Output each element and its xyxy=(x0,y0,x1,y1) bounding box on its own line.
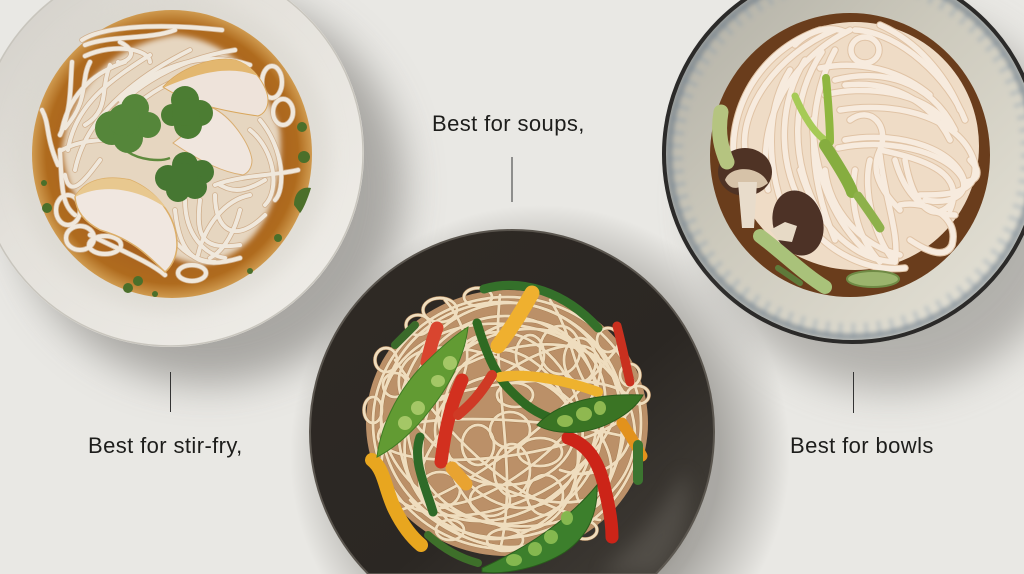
cilantro xyxy=(95,86,214,202)
caption: bowls: Best for bowls xyxy=(790,433,934,458)
panel: soup bowl xyxy=(0,0,404,384)
stir-fry noodles xyxy=(355,288,654,564)
vegetable strips xyxy=(372,285,642,563)
snap peas xyxy=(377,327,643,573)
soup noodles xyxy=(42,26,298,281)
noodle bowl broth xyxy=(710,13,990,297)
panel: noodle bowl with mushrooms xyxy=(662,0,1024,390)
soup broth xyxy=(32,10,312,298)
mushrooms xyxy=(718,148,831,261)
chicken slices xyxy=(75,59,268,272)
herb flecks xyxy=(41,122,311,297)
caption: stir-fry: Best for stir-fry, xyxy=(88,433,243,458)
bowl noodles xyxy=(731,22,979,270)
scallions and cucumber xyxy=(720,78,899,287)
caption: soups: Best for soups, xyxy=(432,111,585,136)
panel: stir-fry bowl xyxy=(290,205,790,574)
